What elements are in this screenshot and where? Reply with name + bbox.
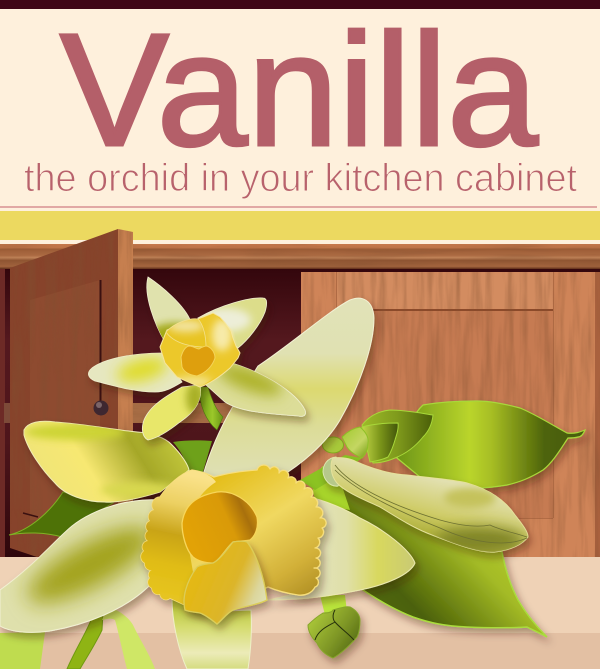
subtitle: the orchid in your kitchen cabinet xyxy=(24,157,577,200)
large pale petal xyxy=(203,298,374,479)
green leaf behind upper petal xyxy=(173,440,212,472)
lower right petal xyxy=(205,358,306,416)
cabinet interior xyxy=(0,268,600,558)
large lower leaf xyxy=(310,467,547,637)
crown molding xyxy=(0,244,600,269)
upper right petal xyxy=(198,298,267,348)
bottom petal xyxy=(142,382,204,440)
counter xyxy=(0,557,600,669)
stem and bud at bottom xyxy=(308,595,360,658)
small lip xyxy=(160,313,240,388)
cabinet xyxy=(0,225,600,560)
stems at bottom left xyxy=(0,610,155,669)
open left door xyxy=(10,229,133,557)
shelf xyxy=(4,403,243,423)
lower left petal xyxy=(0,500,162,632)
top petal xyxy=(146,276,190,339)
top bar xyxy=(0,0,600,9)
lip left lobe xyxy=(141,470,216,612)
small heart throat xyxy=(181,346,215,376)
yellow band xyxy=(0,211,600,240)
icon: flower bud xyxy=(308,607,360,658)
lower center petal xyxy=(172,598,251,669)
door knob xyxy=(94,400,108,416)
top right leaf xyxy=(397,401,585,488)
right cabinet door xyxy=(301,272,600,557)
title: Vanilla xyxy=(60,0,538,179)
upper left petal xyxy=(24,421,189,502)
left petal xyxy=(88,353,182,392)
sheath leaf outer xyxy=(362,410,433,463)
upper green bud sheath xyxy=(342,427,368,458)
large flower lip xyxy=(141,465,326,612)
vanilla pod bud xyxy=(323,457,528,553)
small flower xyxy=(88,277,306,440)
small hood xyxy=(166,319,206,347)
pod cap xyxy=(323,457,345,486)
bright stem highlight xyxy=(313,470,350,510)
right lower petal xyxy=(268,497,415,600)
green connecting stem xyxy=(300,455,362,490)
green stem behind small flower xyxy=(200,387,223,430)
sheath leaf inner xyxy=(362,423,398,462)
small green bud xyxy=(322,437,344,453)
rule xyxy=(0,206,597,208)
front lobe xyxy=(184,541,267,624)
dark green leaf at left xyxy=(9,492,113,537)
flower throat xyxy=(182,492,258,563)
